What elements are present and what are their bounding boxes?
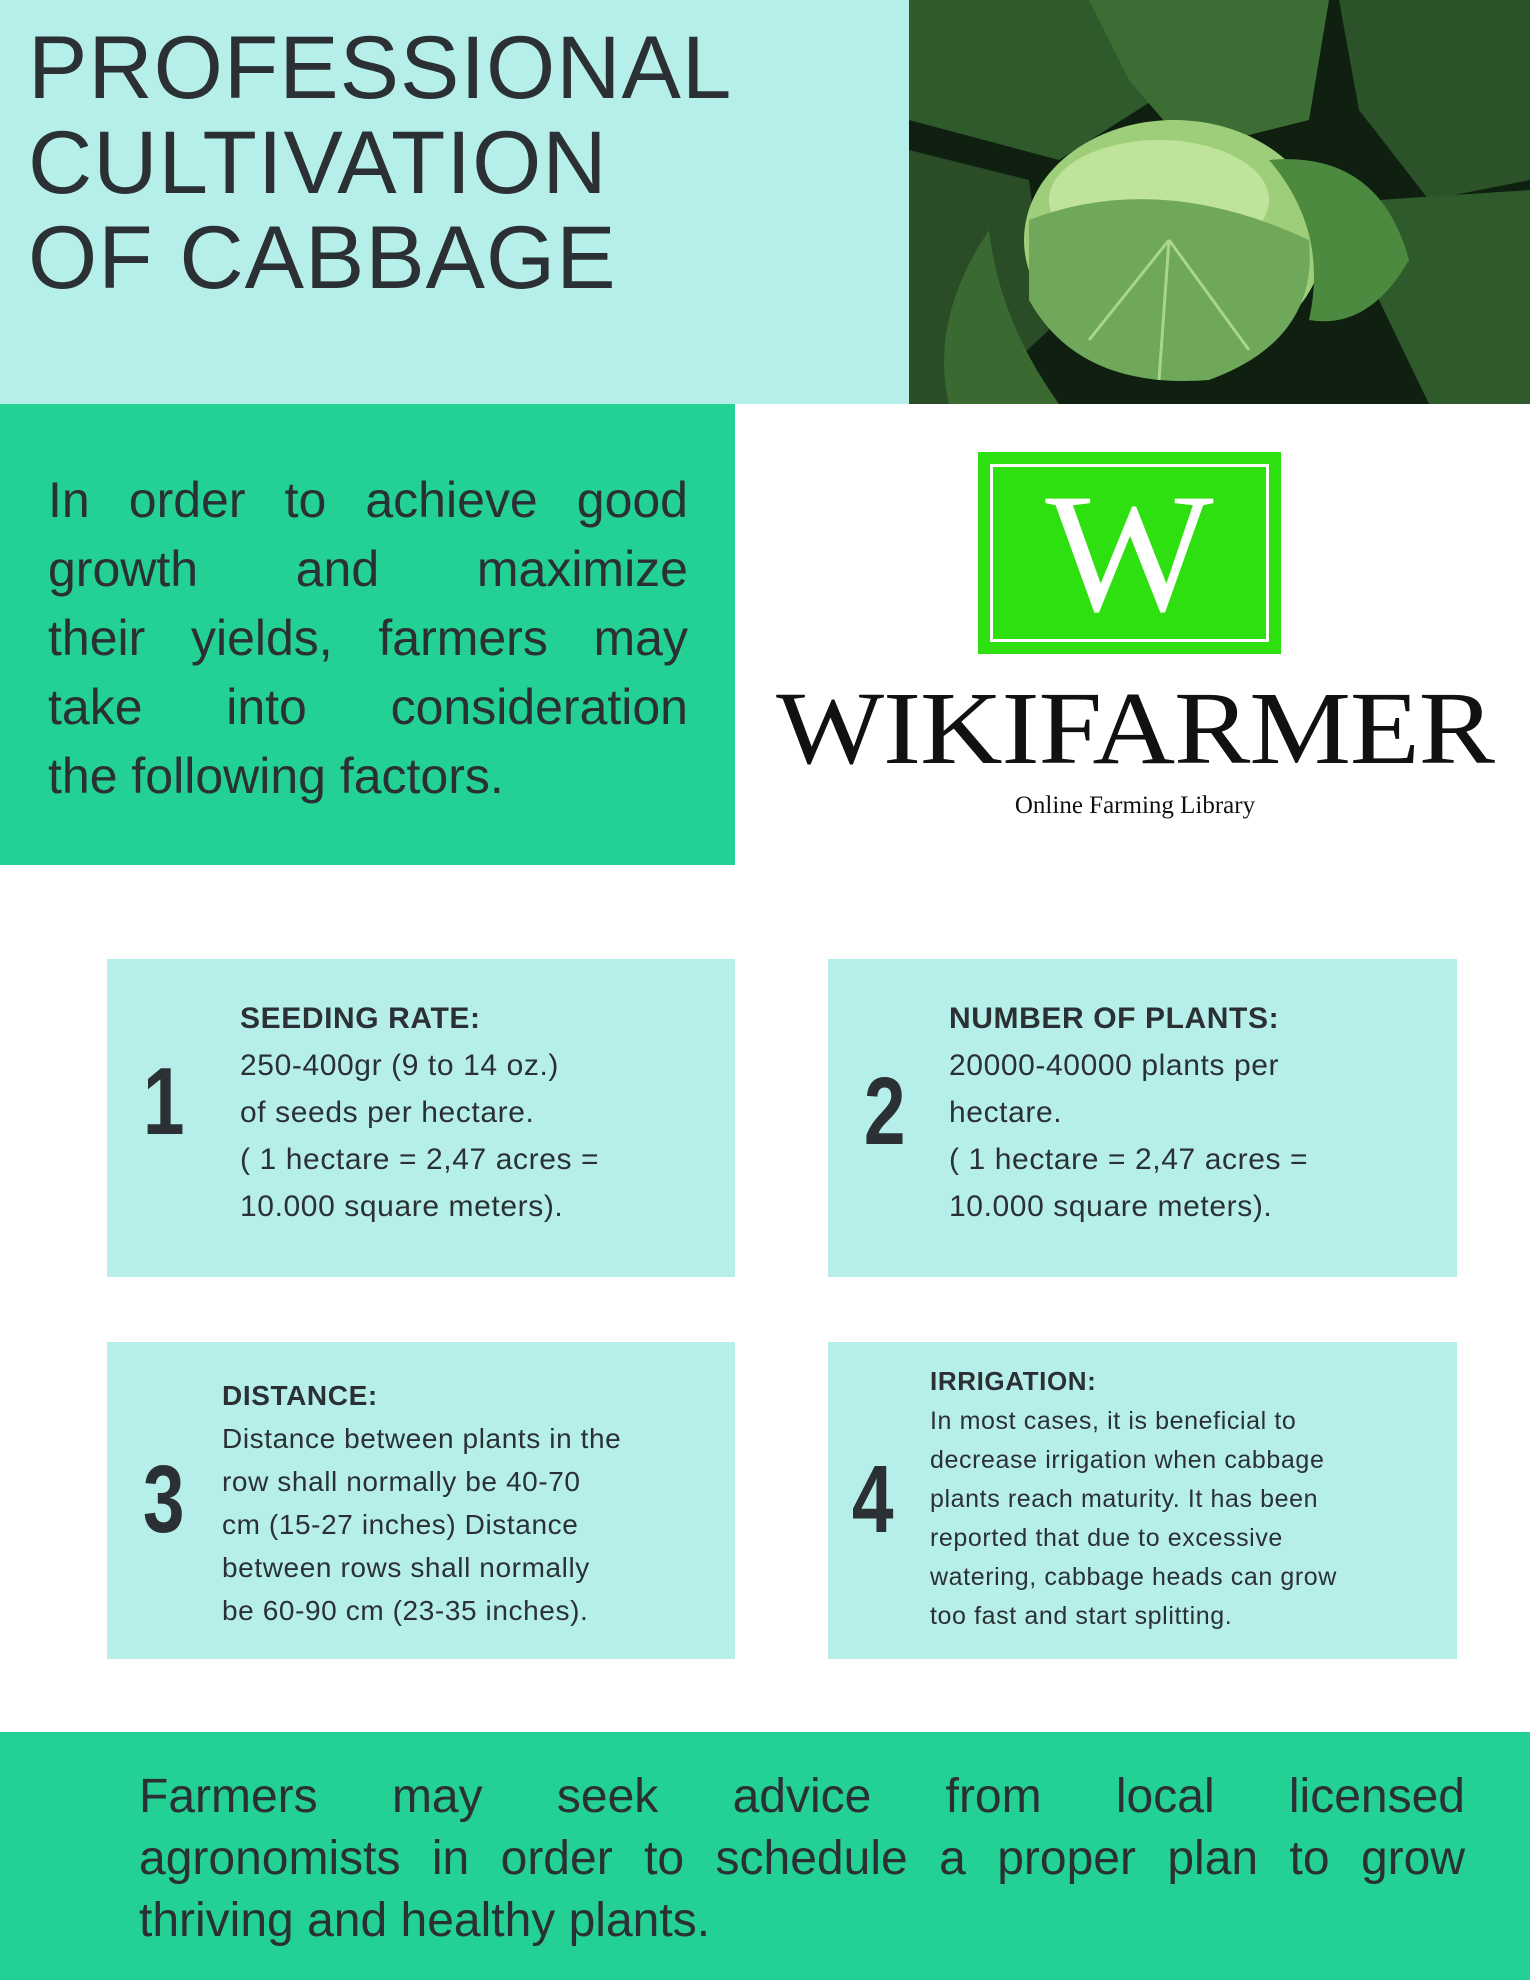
intro paragraph: In order to achieve good [48, 472, 688, 528]
text: irrigation: too fast and start splitting. [930, 1602, 1232, 1630]
text: distance: Distance between plants in the [222, 1423, 621, 1454]
text: irrigation: IRRIGATION: [930, 1366, 1096, 1396]
text: seeding rate [240, 1002, 599, 1223]
logo wordmark: WIKIFARMER [776, 671, 1494, 786]
text: irrigation: decrease irrigation when cabbage [930, 1446, 1324, 1474]
intro paragraph: growth and maximize [48, 541, 688, 597]
panel: title [0, 0, 909, 404]
title: CULTIVATION [28, 112, 608, 212]
footer text: Farmers may seek advice from local licensed [139, 1770, 1465, 1823]
intro paragraph: their yields, farmers may [48, 610, 688, 666]
footer text: thriving and healthy plants. [139, 1894, 710, 1947]
text: irrigation: watering, cabbage heads can grow [930, 1563, 1337, 1591]
title: OF CABBAGE [28, 207, 617, 307]
panel: distance [107, 1342, 735, 1659]
text: distance: cm (15-27 inches) Distance [222, 1509, 578, 1540]
panel: irrigation [828, 1342, 1457, 1659]
text: number of plants [949, 1002, 1308, 1223]
icon: W logo box: W [1045, 459, 1214, 647]
text: number of plants: 10.000 square meters). [949, 1190, 1272, 1223]
title: PROFESSIONAL [28, 17, 732, 117]
text: seeding rate: ( 1 hectare = 2,47 acres = [240, 1143, 599, 1176]
number 4: 4 [852, 1446, 894, 1553]
text: distance: be 60-90 cm (23-35 inches). [222, 1595, 588, 1626]
text: distance: DISTANCE: [222, 1380, 378, 1411]
text: irrigation: In most cases, it is beneficial to [930, 1407, 1296, 1435]
logo tagline: Online Farming Library [1015, 792, 1255, 819]
text: irrigation: plants reach maturity. It has been [930, 1485, 1318, 1513]
logo: wikifarmer [776, 452, 1495, 819]
text: number of plants: hectare. [949, 1096, 1062, 1129]
intro paragraph: the following factors. [48, 748, 504, 804]
panel: intro text [0, 404, 735, 865]
text: distance [222, 1380, 621, 1626]
intro paragraph [48, 472, 688, 804]
panel: footer advice [0, 1732, 1530, 1980]
text: seeding rate: of seeds per hectare. [240, 1096, 534, 1129]
text: number of plants: ( 1 hectare = 2,47 acres = [949, 1143, 1308, 1176]
text: number of plants: NUMBER OF PLANTS: [949, 1002, 1279, 1035]
text: seeding rate: 250-400gr (9 to 14 oz.) [240, 1049, 559, 1082]
number 1: 1 [143, 1048, 185, 1155]
footer text [139, 1770, 1466, 1947]
text: number of plants: 20000-40000 plants per [949, 1049, 1279, 1082]
title [28, 17, 732, 307]
photo: cabbage [909, 0, 1530, 404]
icon: W logo box [978, 452, 1281, 654]
text: distance: row shall normally be 40-70 [222, 1466, 581, 1497]
footer text: agronomists in order to schedule a proper plan to grow [139, 1832, 1465, 1885]
text: irrigation [930, 1366, 1337, 1630]
text: seeding rate: SEEDING RATE: [240, 1002, 481, 1035]
text: seeding rate: 10.000 square meters). [240, 1190, 563, 1223]
number 2: 2 [864, 1058, 906, 1165]
text: irrigation: reported that due to excessive [930, 1524, 1283, 1552]
text: distance: between rows shall normally [222, 1552, 590, 1583]
intro paragraph: take into consideration [48, 679, 688, 735]
panel: seeding rate [107, 959, 735, 1277]
panel: number of plants [828, 959, 1457, 1277]
number 3: 3 [143, 1446, 185, 1553]
